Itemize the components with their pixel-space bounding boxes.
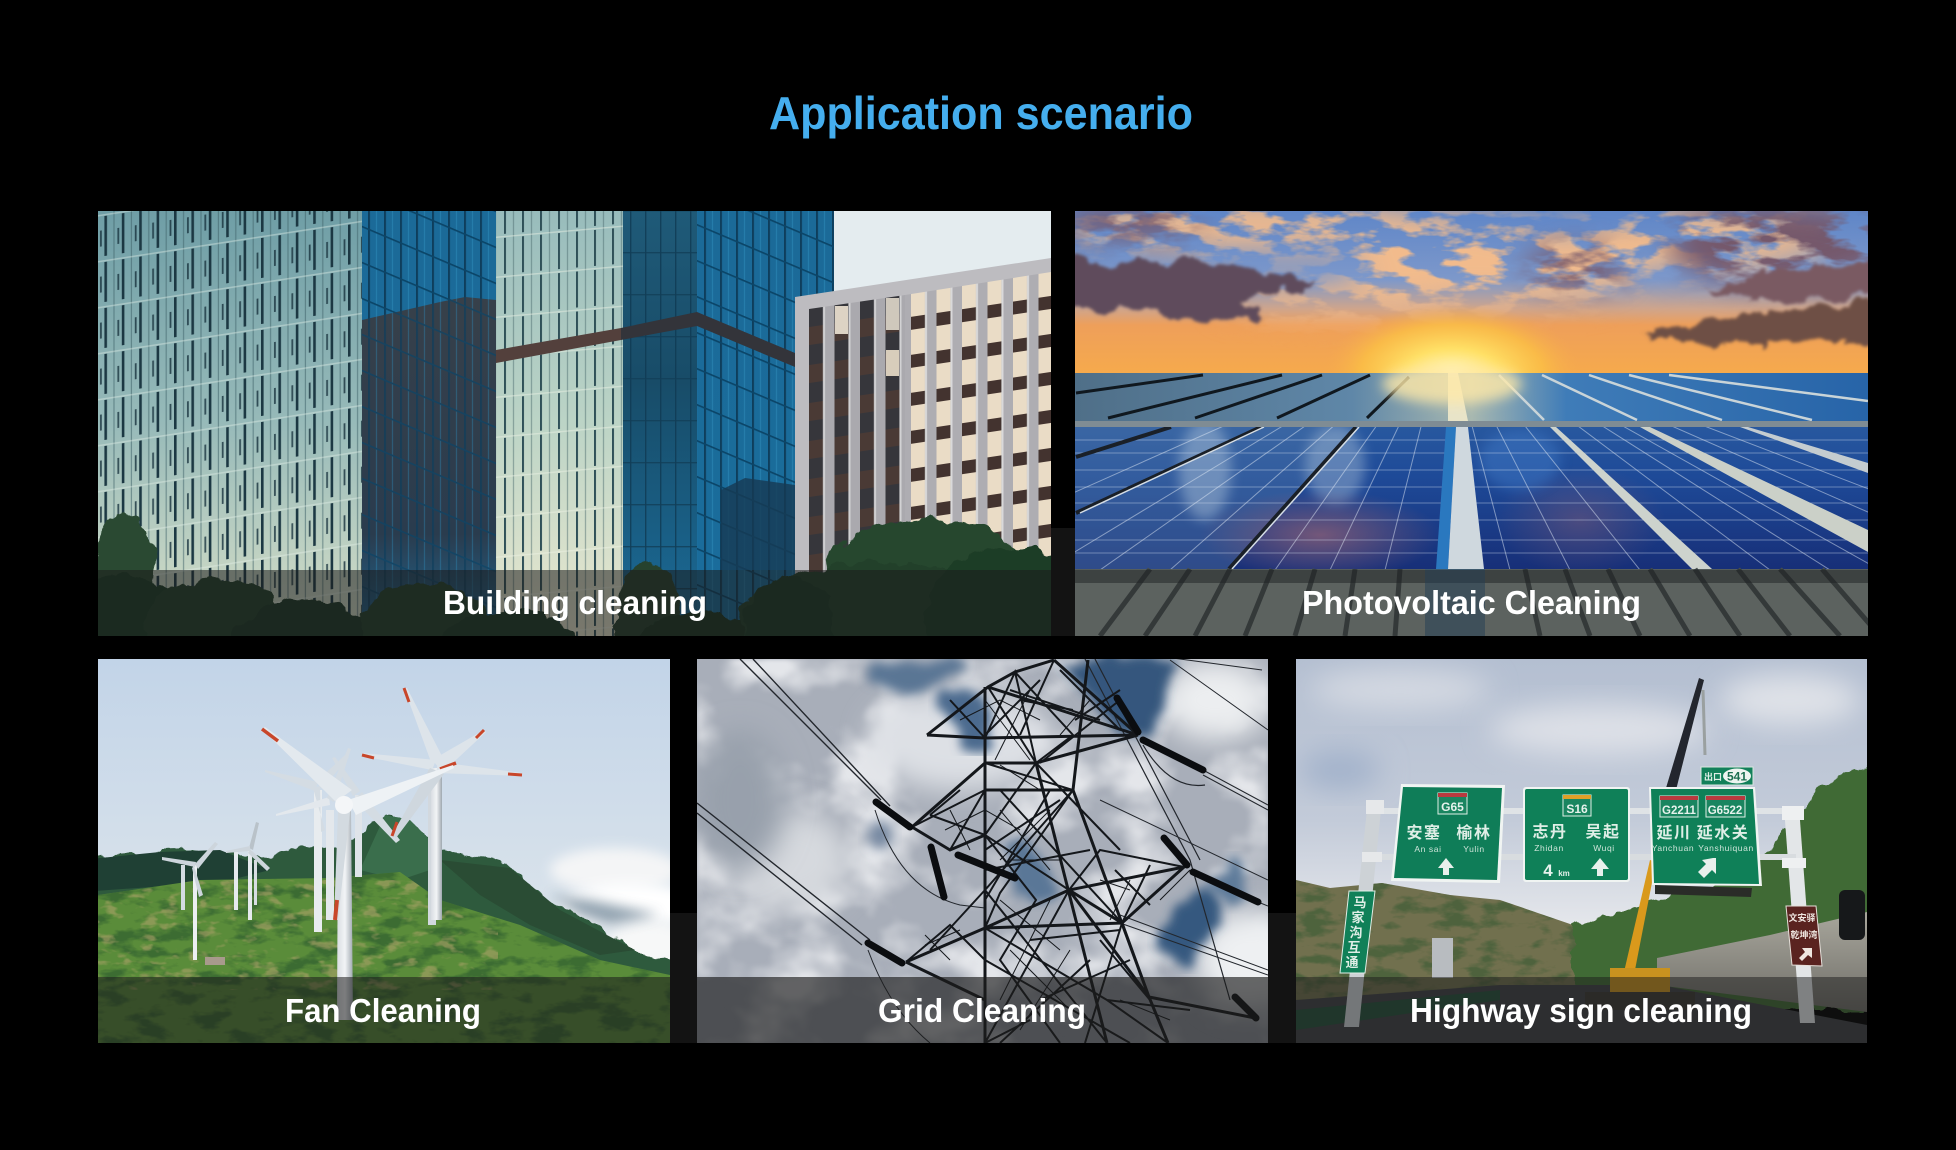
- panel: grid cleaning: [695, 655, 1305, 1043]
- sign: exit 541: 出口: [1704, 771, 1722, 782]
- sign: scenic brown: 乾坤湾: [1790, 929, 1818, 940]
- caption band: [98, 570, 1051, 636]
- large turbine front: [262, 727, 454, 1020]
- photo: sky: [1296, 659, 1867, 929]
- wind turbines: [162, 688, 522, 1020]
- panel: photovoltaic cleaning: [1075, 211, 1868, 636]
- photo: green hills: [98, 814, 670, 1043]
- mid turbines: [265, 748, 436, 932]
- sign: exit 541: 541: [1727, 770, 1747, 784]
- corrugated roof: [1075, 569, 1880, 636]
- caption band: [697, 977, 1268, 1043]
- caption: Building cleaning: [443, 584, 707, 621]
- sign: scenic brown: [1786, 906, 1822, 966]
- sign: S16 Zhidan Wuqi: 4: [1543, 861, 1553, 880]
- truck mirror: [1839, 890, 1865, 940]
- sign: S16 Zhidan Wuqi: Wuqi: [1593, 843, 1615, 853]
- solar panel array: far row: [1075, 364, 1868, 427]
- large turbine rear: [362, 688, 522, 920]
- sign: Majiagou interchange: [1340, 891, 1375, 973]
- caption band: [98, 977, 670, 1043]
- sign: G2211 G6522 Yanchuan Yanshuiguan: [1649, 787, 1762, 897]
- background strips between panels: [670, 528, 1296, 1043]
- sign: S16 Zhidan Wuqi: S16: [1566, 802, 1588, 816]
- grey sign back: [1432, 938, 1453, 978]
- caption: Highway sign cleaning: [1410, 992, 1752, 1029]
- sign: S16 Zhidan Wuqi: Zhidan: [1534, 843, 1564, 853]
- photo: hills and road: [1296, 745, 1900, 1043]
- photo: cloudy sky: [695, 659, 1305, 1043]
- gantry poles and beams: [1344, 800, 1815, 1027]
- photo: sky and clouds: [98, 659, 670, 960]
- photo: sunset sky with clouds: [1075, 211, 1868, 373]
- sign: S16 Zhidan Wuqi: km: [1558, 869, 1570, 878]
- solar panel array: near row: [1075, 427, 1868, 569]
- sign: G2211 G6522 Yanchuan Yanshuiguan: G2211: [1662, 805, 1697, 817]
- sign: G65 Ansai Yulin: G65: [1441, 800, 1464, 814]
- small building: [205, 957, 225, 965]
- caption band: [1296, 977, 1867, 1043]
- sign: S16 Zhidan Wuqi: [1523, 787, 1630, 882]
- caption: Fan Cleaning: [285, 992, 481, 1029]
- title: Application scenario: [769, 87, 1193, 139]
- power lines: [697, 655, 1268, 1043]
- sign: G65 Ansai Yulin: An sai: [1414, 844, 1442, 854]
- sign: Majiagou interchange: 沟: [1349, 925, 1363, 940]
- distant turbines: [162, 822, 270, 960]
- panel: highway sign cleaning: [1296, 659, 1900, 1043]
- sign: G65 Ansai Yulin: Yulin: [1463, 844, 1485, 854]
- caption band: [1075, 570, 1868, 636]
- sign: Majiagou interchange: 通: [1345, 955, 1359, 970]
- sign: exit 541: [1701, 767, 1753, 785]
- sign: G65 Ansai Yulin: [1391, 784, 1505, 883]
- sign: Majiagou interchange: 家: [1351, 910, 1365, 925]
- sign: S16 Zhidan Wuqi: 志丹: [1532, 823, 1568, 841]
- caption: Photovoltaic Cleaning: [1302, 584, 1641, 621]
- sign: G2211 G6522 Yanchuan Yanshuiguan: G6522: [1708, 805, 1742, 817]
- sign: G65 Ansai Yulin: 安塞: [1406, 823, 1442, 842]
- sign: S16 Zhidan Wuqi: 吴起: [1585, 823, 1621, 841]
- insulators: [868, 698, 1258, 1018]
- sign: G2211 G6522 Yanchuan Yanshuiguan: Yanchuan: [1652, 843, 1694, 853]
- sign: G2211 G6522 Yanchuan Yanshuiguan: Yanshuiquan: [1698, 843, 1754, 853]
- transmission tower: [906, 660, 1255, 1043]
- panel: fan cleaning: [98, 659, 670, 1043]
- sign: G2211 G6522 Yanchuan Yanshuiguan: 延水关: [1697, 823, 1749, 842]
- trees: [98, 512, 1051, 636]
- sign: G65 Ansai Yulin: 榆林: [1456, 823, 1492, 842]
- sign: Majiagou interchange: 马: [1353, 895, 1367, 910]
- sign: G2211 G6522 Yanchuan Yanshuiguan: 延川: [1656, 824, 1692, 842]
- caption: Grid Cleaning: [878, 992, 1086, 1029]
- panel: building cleaning: [98, 211, 1051, 636]
- sign: Majiagou interchange: 互: [1347, 940, 1361, 955]
- photo: glass towers and office block: [98, 211, 1051, 636]
- crane: [1585, 678, 1705, 1010]
- sign: scenic brown: 文安驿: [1788, 912, 1816, 923]
